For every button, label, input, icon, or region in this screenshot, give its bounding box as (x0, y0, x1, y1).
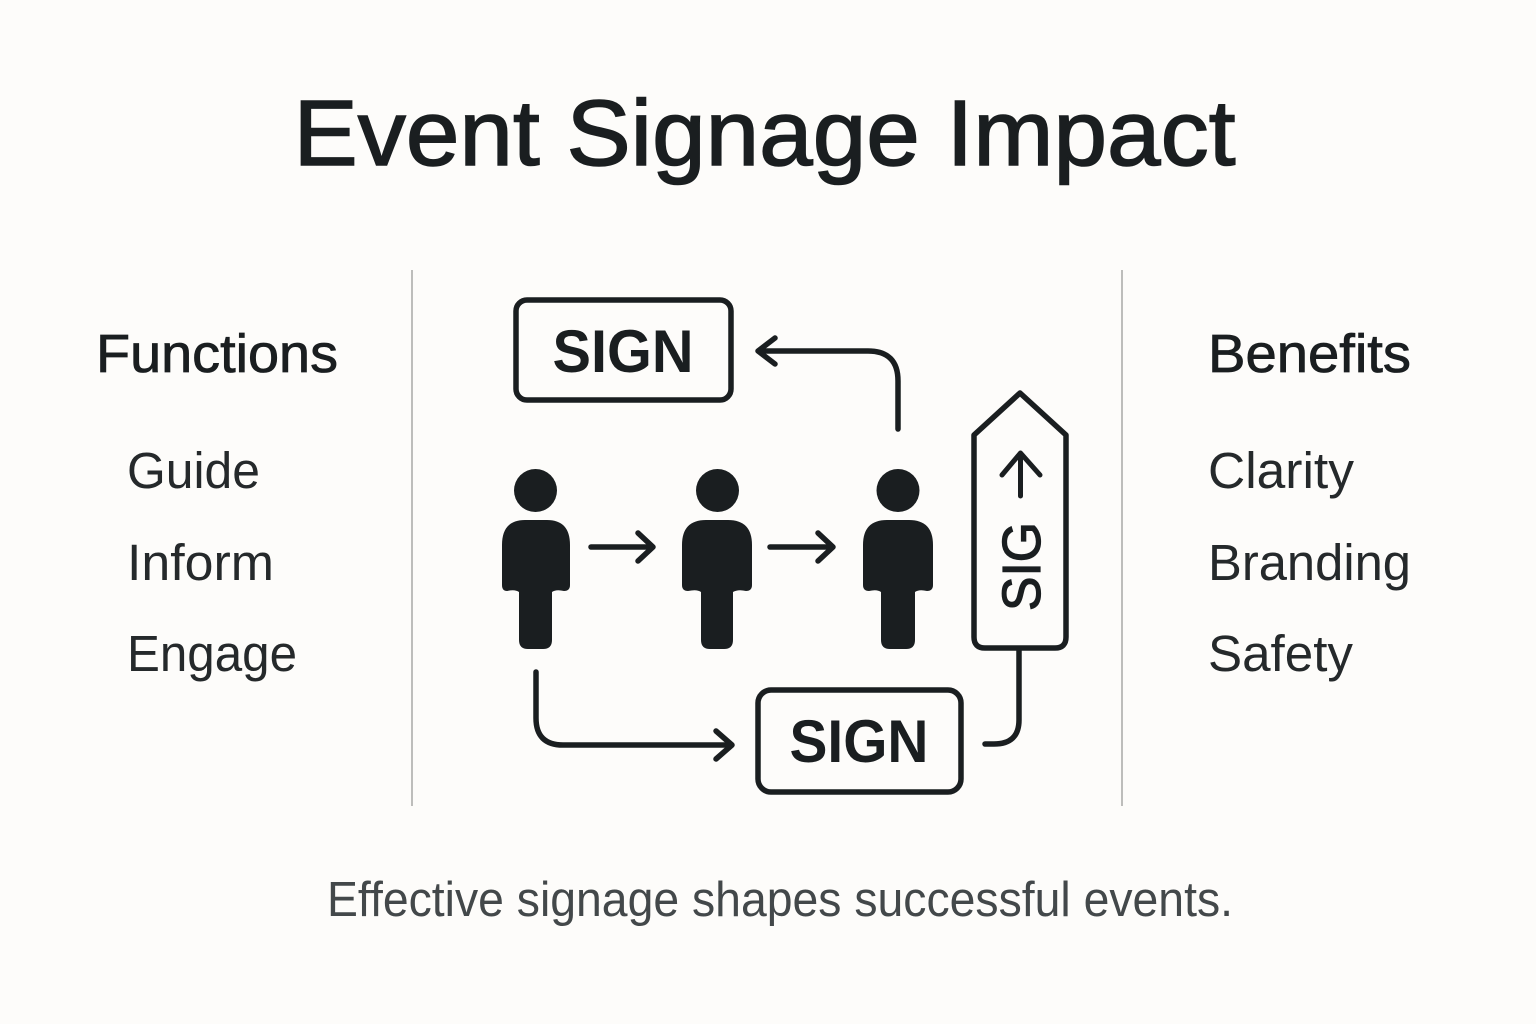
person 2 (682, 469, 752, 649)
arrow: person 2 to 3 (770, 533, 833, 561)
person 1 (502, 469, 570, 649)
heading: functions: Functions (96, 324, 338, 384)
panel: benefits (1208, 324, 1411, 682)
connector: bottom sign to arrow sign (985, 650, 1019, 744)
item: engage: Engage (127, 625, 297, 682)
caption: Effective signage shapes successful events. (327, 873, 1233, 927)
title: Event Signage Impact (294, 81, 1236, 185)
panel: functions (96, 324, 338, 682)
diagram: signage flow (502, 300, 1066, 792)
sign: bottom (758, 690, 961, 792)
item: inform: Inform (127, 534, 274, 591)
item: guide: Guide (127, 442, 260, 499)
item: branding: Branding (1208, 534, 1411, 591)
sign: vertical arrow (974, 393, 1066, 648)
item: safety: Safety (1208, 625, 1353, 682)
arrow: person 1 to bottom sign (536, 672, 732, 759)
arrow: up to top sign (758, 338, 898, 429)
item: clarity: Clarity (1208, 442, 1354, 499)
arrow: person 1 to 2 (591, 533, 653, 561)
person 3 (863, 469, 933, 649)
sign: top (516, 300, 731, 400)
sign: vertical arrow: SIG (992, 522, 1052, 611)
sign: bottom: SIGN (790, 708, 928, 775)
sign: top: SIGN (552, 318, 694, 385)
heading: benefits: Benefits (1208, 324, 1411, 384)
